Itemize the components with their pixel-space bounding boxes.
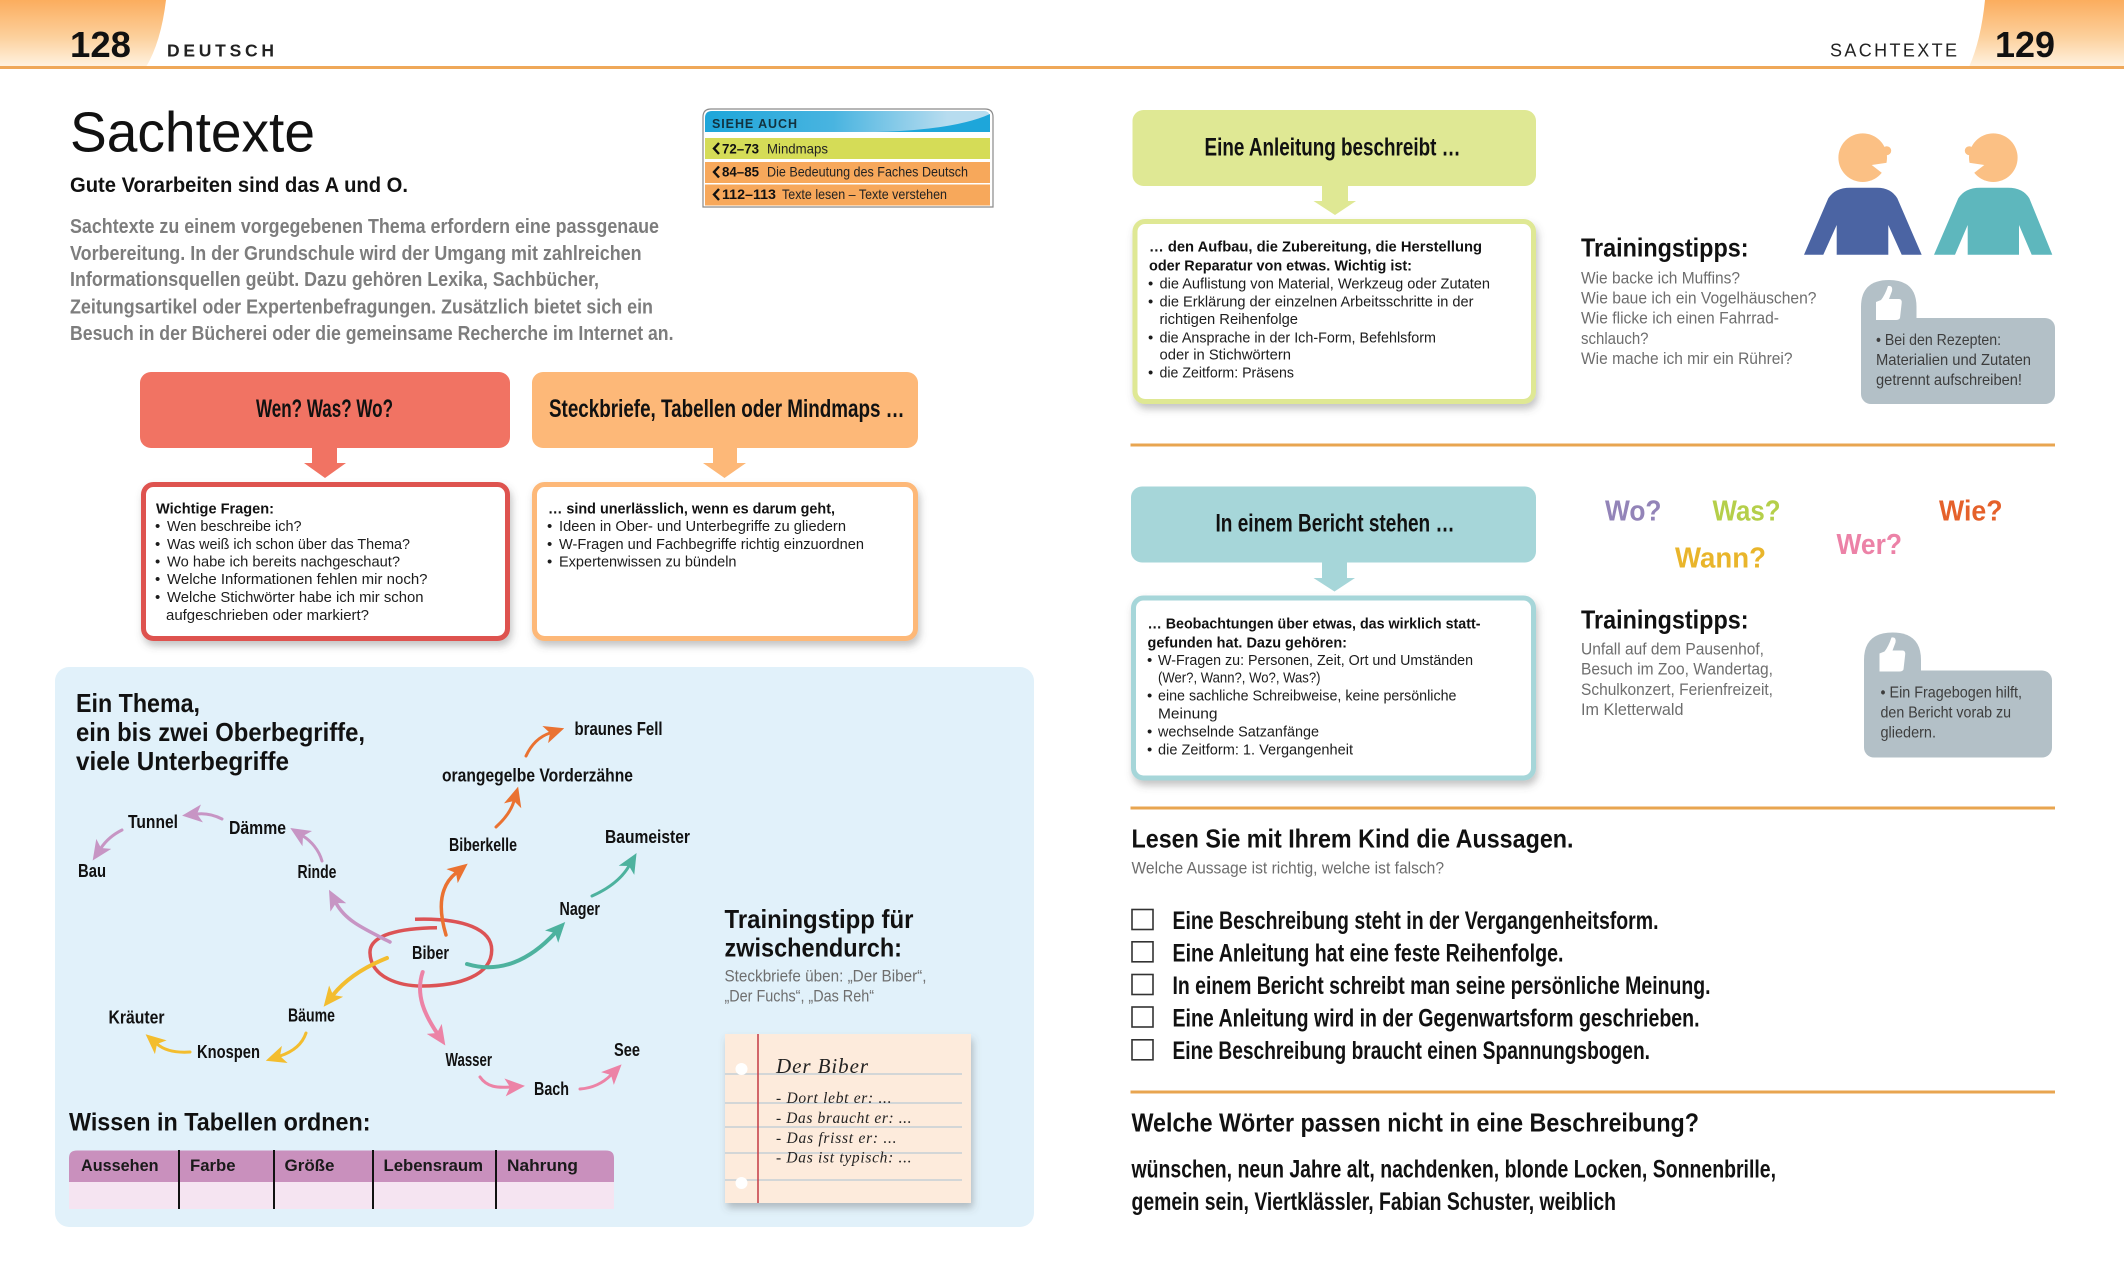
callout: Bei den Rezepten: getrennt aufschreiben! (1876, 372, 2022, 389)
heading: Ein Thema: Ein Thema, (76, 688, 200, 718)
notebook note: Der Biber: - Das braucht er: ... (776, 1110, 912, 1127)
panel: siehe auch: 84–85 (722, 164, 759, 180)
panel: Wen? Was? Wo?: Wichtige Fragen: (156, 500, 274, 518)
panel: Wen? Was? Wo?: Was weiß ich schon über das Thema? (167, 536, 410, 553)
arrows: pink branch (420, 972, 611, 1089)
panel: In einem Bericht stehen: • (1147, 724, 1152, 740)
mindmap labels: See (614, 1040, 640, 1060)
heading: Lesen Sie mit Ihrem Kind die Aussagen: Lesen Sie mit Ihrem Kind die Aussagen. (1132, 824, 1574, 854)
table (69, 1150, 614, 1209)
text: word list: gemein sein, Viertklässler, Fabian Schuster, weiblich (1132, 1188, 1616, 1216)
panel: Eine Anleitung beschreibt (1132, 110, 1536, 402)
panel: Eine Anleitung beschreibt: die Zeitform: Präsens (1160, 364, 1294, 382)
notebook note: Der Biber: - Dort lebt er: ... (776, 1090, 892, 1107)
text: Trainingstipps list 1: Wie baue ich ein Vogelhäuschen? (1581, 290, 1816, 308)
table: Lebensraum (384, 1157, 483, 1175)
mindmap labels: Bau (78, 861, 106, 881)
W-questions word cloud: Wer? (1836, 529, 1902, 561)
callout: Ein Fragebogen hilft: den Bericht vorab zu (1880, 704, 2011, 722)
panel: Wen? Was? Wo?: Welche Informationen fehlen mir noch? (167, 571, 428, 588)
icon: two people talking (1804, 133, 2052, 255)
intro text: Informationsquellen geübt. Dazu gehören Lexika, Sachbücher, (70, 269, 599, 291)
panel: Eine Anleitung beschreibt: • (1148, 364, 1153, 382)
panel: In einem Bericht stehen: W-Fragen zu: Personen, Zeit, Ort und Umständen (1158, 652, 1473, 669)
panel: In einem Bericht stehen: Meinung (1158, 706, 1218, 722)
panel: Steckbriefe, Tabellen oder Mindmaps: • (547, 518, 552, 535)
panel: Eine Anleitung beschreibt: • (1148, 276, 1153, 292)
W-questions word cloud: Wo? (1605, 496, 1662, 528)
arrows: purple branch (101, 814, 390, 942)
heading: Trainingstipp für zwischendurch: zwischendurch: (724, 932, 902, 962)
page header right: SACHTEXTE (1830, 40, 1957, 60)
text: Trainingstipps list 1: Wie flicke ich einen Fahrrad- (1581, 310, 1779, 328)
panel: siehe auch: SIEHE AUCH (712, 117, 797, 131)
icon: thumbs up (1880, 637, 1905, 672)
text: word list: wünschen, neun Jahre alt, nachdenken, blonde Locken, Sonnenbrille, (1131, 1156, 1776, 1184)
text: Trainingstipps list 1 (1581, 270, 1816, 368)
heading: Trainingstipps 1: Trainingstipps: (1581, 232, 1748, 262)
panel: Wen? Was? Wo?: • (155, 554, 160, 570)
checklist: Eine Anleitung wird in der Gegenwartsform geschrieben. (1172, 1004, 1700, 1032)
panel: siehe auch: 72–73 (722, 140, 759, 156)
subtitle: Gute Vorarbeiten sind das A und O. (70, 174, 408, 197)
mindmap labels: Baumeister (605, 827, 690, 847)
person right (1934, 133, 2052, 255)
text: Trainingstipps list 2: Im Kletterwald (1581, 701, 1684, 719)
text: Steckbriefe üben: Steckbriefe üben: „Der Biber“, (724, 968, 926, 986)
notebook note: Der Biber: - Das ist typisch: ... (776, 1150, 912, 1166)
panel: Steckbriefe, Tabellen oder Mindmaps: Ideen in Ober- und Unterbegriffe zu gliedern (559, 518, 846, 535)
callout: Bei den Rezepten (1861, 280, 2055, 404)
panel: Eine Anleitung beschreibt: Eine Anleitung beschreibt … (1204, 134, 1460, 162)
mindmap labels: Dämme (229, 818, 286, 838)
panel: Steckbriefe, Tabellen oder Mindmaps: … sind unerlässlich, wenn es darum geht, (548, 500, 835, 518)
text: Trainingstipps list 1: Wie mache ich mir ein Rührei? (1581, 350, 1792, 368)
heading: Wissen in Tabellen ordnen: Wissen in Tabellen ordnen: (69, 1108, 370, 1136)
heading: Ein Thema (76, 688, 365, 776)
checklist: In einem Bericht schreibt man seine persönliche Meinung. (1172, 972, 1710, 1000)
panel: Wen? Was? Wo? (140, 372, 510, 638)
callout: Ein Fragebogen hilft: • Ein Fragebogen hilft, (1880, 684, 2022, 702)
panel: Wen? Was? Wo?: Welche Stichwörter habe ich mir schon (167, 589, 424, 606)
text: Welche Aussage ist richtig: Welche Aussage ist richtig, welche ist falsch? (1132, 860, 1444, 878)
mindmap labels: braunes Fell (574, 719, 662, 739)
panel: Steckbriefe, Tabellen oder Mindmaps: • (547, 536, 552, 553)
panel: Eine Anleitung beschreibt: die Auflistung von Material, Werkzeug oder Zutaten (1160, 276, 1490, 292)
arrows: teal branch (467, 866, 629, 967)
intro text: Vorbereitung. In der Grundschule wird der Umgang mit zahlreichen (70, 243, 642, 265)
text: Trainingstipps list 2: Schulkonzert, Ferienfreizeit, (1581, 681, 1773, 699)
text: Trainingstipps list 1: Wie backe ich Muffins? (1581, 270, 1740, 288)
text: word list (1131, 1156, 1776, 1216)
W-questions word cloud (1605, 496, 2002, 574)
notebook note: Der Biber: - Das frisst er: ... (776, 1130, 896, 1147)
page header left (0, 0, 1062, 69)
panel: Eine Anleitung beschreibt: • (1148, 330, 1153, 346)
panel: Steckbriefe, Tabellen oder Mindmaps: • (547, 554, 552, 570)
panel: Wen? Was? Wo?: • (155, 518, 160, 535)
mindmap labels: Kräuter (108, 1008, 164, 1028)
text: Trainingstipps list 2: Unfall auf dem Pausenhof, (1581, 640, 1764, 658)
icon: thumbs up (1876, 286, 1902, 320)
panel: siehe auch: Mindmaps (767, 140, 828, 156)
arrows: orange branch (441, 733, 550, 935)
W-questions word cloud: Wann? (1675, 542, 1766, 574)
panel: In einem Bericht stehen: gefunden hat. Dazu gehören: (1148, 634, 1347, 652)
W-questions word cloud: Was? (1712, 496, 1780, 528)
notebook note: Der Biber: Der Biber (775, 1054, 869, 1078)
panel: Steckbriefe, Tabellen oder Mindmaps: Expertenwissen zu bündeln (559, 554, 736, 570)
panel: Wen? Was? Wo?: Wo habe ich bereits nachgeschaut? (167, 554, 400, 570)
panel: Eine Anleitung beschreibt: oder Reparatur von etwas. Wichtig ist: (1149, 258, 1412, 274)
panel: In einem Bericht stehen: … Beobachtungen über etwas, das wirklich statt- (1148, 616, 1480, 632)
checklist: Eine Beschreibung steht in der Vergangenheitsform. (1172, 907, 1658, 935)
arrows: yellow branch (157, 958, 387, 1056)
panel: In einem Bericht stehen: • (1147, 652, 1152, 669)
panel: In einem Bericht stehen: eine sachliche Schreibweise, keine persönliche (1158, 688, 1456, 704)
intro text: Sachtexte zu einem vorgegebenen Thema erfordern eine passgenaue (70, 216, 659, 238)
panel: Eine Anleitung beschreibt: die Erklärung der einzelnen Arbeitsschritte in der (1160, 294, 1474, 310)
mindmap labels (78, 719, 690, 1099)
mindmap labels: Wasser (446, 1050, 492, 1070)
panel: Wen? Was? Wo?: Wen beschreibe ich? (167, 518, 302, 535)
panel: siehe auch (703, 109, 993, 207)
mindmap labels: Rinde (298, 862, 336, 882)
intro text: Zeitungsartikel oder Expertenbefragungen. Zusätzlich bietet sich ein (70, 296, 653, 318)
panel: siehe auch: Die Bedeutung des Faches Deutsch (767, 164, 968, 180)
callout: Ein Fragebogen hilft: gliedern. (1880, 724, 1936, 742)
heading: Trainingstipp für zwischendurch: Trainingstipp für (724, 904, 914, 934)
panel: In einem Bericht stehen (1131, 486, 1536, 778)
text: Steckbriefe üben: „Der Fuchs“, „Das Reh“ (724, 988, 874, 1006)
panel: siehe auch: Texte lesen – Texte verstehen (782, 186, 947, 202)
panel: In einem Bericht stehen: • (1147, 688, 1152, 704)
checklist (1132, 907, 1710, 1065)
panel: Steckbriefe, Tabellen oder Mindmaps (532, 372, 918, 638)
panel: siehe auch: 112–113 (722, 186, 776, 202)
panel: Wen? Was? Wo?: • (155, 571, 160, 588)
panel: In einem Bericht stehen: • (1147, 742, 1152, 758)
panel: Wen? Was? Wo?: Wen? Was? Wo? (256, 395, 393, 423)
panel: Wen? Was? Wo?: aufgeschrieben oder markiert? (166, 607, 369, 624)
heading: Welche Wörter passen nicht: Welche Wörter passen nicht in eine Beschreibung? (1132, 1108, 1699, 1138)
panel: In einem Bericht stehen: (Wer?, Wann?, Wo?, Was?) (1158, 670, 1321, 686)
panel: Steckbriefe, Tabellen oder Mindmaps: W-Fragen und Fachbegriffe richtig einzuordnen (559, 536, 864, 553)
mindmap labels: Bäume (288, 1006, 335, 1026)
intro text: Besuch in der Bücherei oder die gemeinsame Recherche im Internet an. (70, 323, 674, 345)
table: Aussehen (81, 1157, 158, 1175)
panel: In einem Bericht stehen: wechselnde Satzanfänge (1157, 724, 1319, 740)
checklist: Eine Anleitung hat eine feste Reihenfolge. (1172, 940, 1564, 968)
table: Farbe (190, 1157, 236, 1175)
panel: Eine Anleitung beschreibt: oder in Stichwörtern (1160, 346, 1291, 364)
mindmap labels: Tunnel (128, 812, 178, 832)
mindmap labels: Biberkelle (449, 835, 517, 855)
heading: Ein Thema: viele Unterbegriffe (76, 746, 289, 776)
panel: In einem Bericht stehen: In einem Bericht stehen … (1216, 510, 1454, 538)
text: Trainingstipps list 2 (1581, 640, 1773, 719)
checklist: Eine Beschreibung braucht einen Spannungsbogen. (1172, 1037, 1650, 1065)
table: Größe (284, 1157, 334, 1175)
panel: mindmap and tables background (55, 667, 1034, 1227)
panel: Eine Anleitung beschreibt: … den Aufbau, die Zubereitung, die Herstellung (1149, 238, 1482, 256)
panel: Eine Anleitung beschreibt: die Ansprache in der Ich-Form, Befehlsform (1160, 330, 1436, 346)
panel: Wen? Was? Wo?: • (155, 536, 160, 553)
mindmap labels: Nager (560, 899, 600, 919)
mindmap chart (78, 719, 690, 1099)
text: Trainingstipps list 2: Besuch im Zoo, Wandertag, (1581, 660, 1773, 678)
mindmap labels: orangegelbe Vorderzähne (442, 766, 633, 786)
table: Nahrung (507, 1157, 578, 1175)
text: Trainingstipps list 1: schlauch? (1581, 330, 1648, 348)
mindmap labels: Biber (412, 943, 449, 963)
intro text (70, 216, 674, 345)
panel: Wen? Was? Wo?: • (155, 589, 160, 606)
page header left: 128 (70, 24, 131, 65)
panel: In einem Bericht stehen: die Zeitform: 1. Vergangenheit (1158, 742, 1354, 758)
callout: Bei den Rezepten: • Bei den Rezepten: (1876, 332, 2001, 349)
title: Sachtexte (70, 100, 315, 164)
page header left: DEUTSCH (167, 40, 274, 60)
page header right: 129 (1995, 24, 2055, 65)
panel: Eine Anleitung beschreibt: • (1148, 294, 1153, 310)
page header right (1062, 0, 2124, 69)
callout: Bei den Rezepten: Materialien und Zutaten (1876, 352, 2031, 369)
heading: Ein Thema: ein bis zwei Oberbegriffe, (76, 717, 365, 747)
heading: Trainingstipp für zwischendurch (724, 904, 914, 962)
panel: Steckbriefe, Tabellen oder Mindmaps: Steckbriefe, Tabellen oder Mindmaps … (549, 395, 904, 423)
mindmap labels: Bach (534, 1079, 569, 1099)
W-questions word cloud: Wie? (1939, 496, 2002, 528)
notebook note: Der Biber (725, 1034, 971, 1203)
heading: Trainingstipps 2: Trainingstipps: (1581, 604, 1748, 634)
text: Steckbriefe üben (724, 968, 926, 1006)
mindmap labels: Knospen (197, 1042, 260, 1062)
panel: Eine Anleitung beschreibt: richtigen Reihenfolge (1160, 311, 1298, 328)
callout: Ein Fragebogen hilft (1864, 632, 2052, 758)
person left (1804, 133, 1922, 255)
